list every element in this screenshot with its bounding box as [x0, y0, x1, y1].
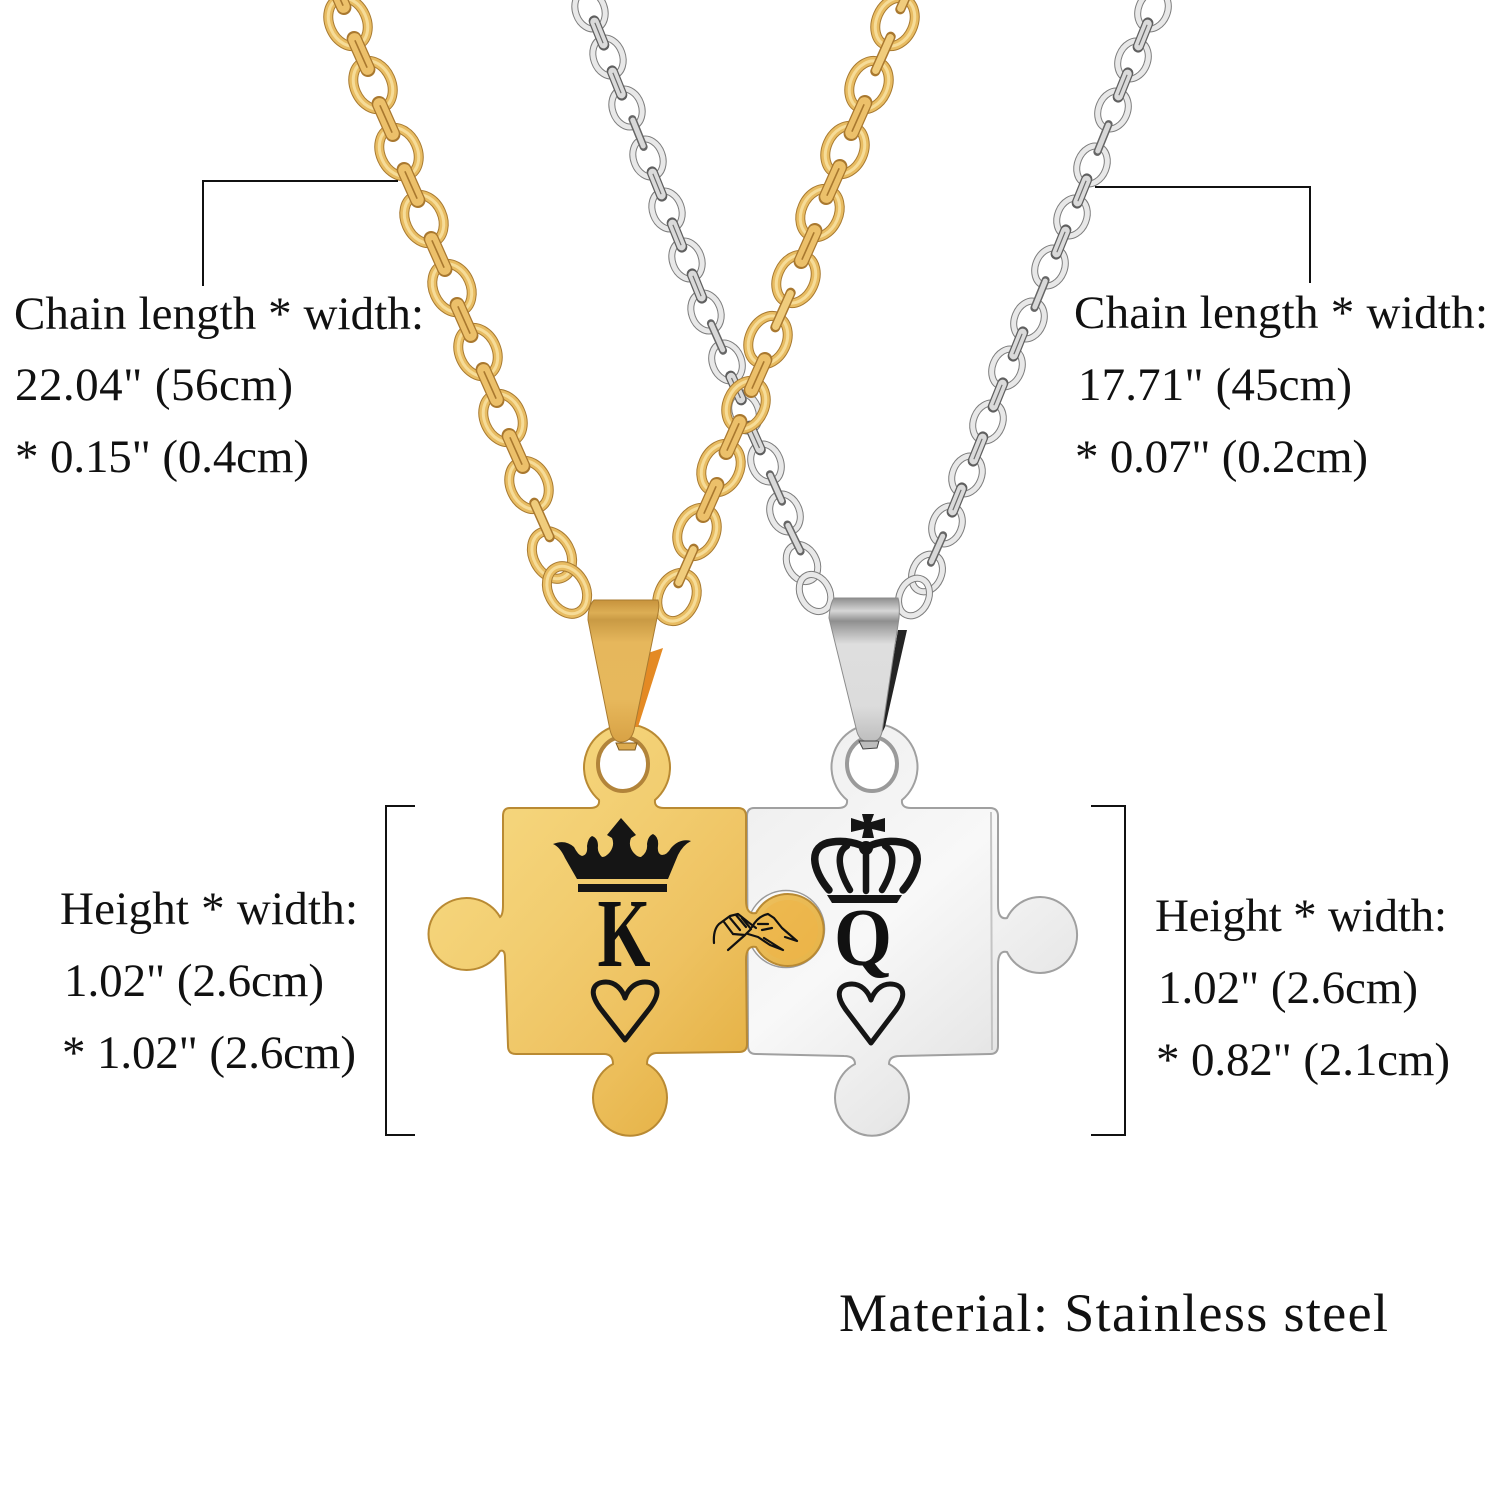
- bracket: left height: [386, 806, 415, 1135]
- pinky promise hands: [714, 914, 797, 950]
- label: material: Material: Stainless steel: [839, 1283, 1388, 1343]
- letter K: K: [598, 880, 650, 987]
- label: gold chain size: * 0.15" (0.4cm): [15, 431, 309, 483]
- silver loop hole: [847, 737, 897, 791]
- label: king pendant size: 1.02" (2.6cm): [64, 955, 324, 1007]
- silver bail: [829, 598, 899, 742]
- silver bail end: [859, 741, 879, 749]
- label: queen pendant size: 1.02" (2.6cm): [1158, 962, 1418, 1014]
- label: gold chain size: 22.04" (56cm): [15, 359, 293, 411]
- silver chain left strand: [570, 0, 837, 617]
- gold puzzle piece: [429, 724, 824, 1136]
- label: king pendant size: [60, 883, 358, 1079]
- letter Q: Q: [834, 892, 892, 983]
- label: queen pendant size: * 0.82" (2.1cm): [1156, 1034, 1450, 1086]
- silver queen pendant: [747, 598, 1077, 1136]
- gold king pendant: [429, 600, 824, 1136]
- silver bail side: [880, 630, 907, 737]
- queen crown: [815, 814, 917, 903]
- queen heart: [839, 984, 903, 1043]
- king crown: [553, 818, 691, 892]
- label: silver chain size: Chain length * width:: [1074, 287, 1488, 339]
- label: queen pendant size: [1155, 890, 1450, 1086]
- gold bail end: [616, 743, 637, 750]
- gold chain right strand: [650, 0, 922, 627]
- silver puzzle piece: [747, 724, 1077, 1136]
- gold chain left strand: [321, 0, 595, 621]
- silver chain right strand: [893, 0, 1174, 621]
- leader line: silver chain: [1095, 187, 1310, 283]
- gold knob shading: [758, 900, 818, 960]
- silver right edge shading: [991, 812, 992, 1050]
- label: queen pendant size: Height * width:: [1155, 890, 1447, 942]
- label: gold chain size: Chain length * width:: [14, 288, 424, 340]
- label: king pendant size: * 1.02" (2.6cm): [62, 1027, 356, 1079]
- label: silver chain size: [1074, 287, 1488, 483]
- label: king pendant size: Height * width:: [60, 883, 358, 935]
- label: gold chain size: [14, 288, 424, 483]
- label: silver chain size: 17.71" (45cm): [1078, 359, 1352, 411]
- label: silver chain size: * 0.07" (0.2cm): [1075, 431, 1368, 483]
- silver rim around gold knob: [748, 890, 824, 968]
- bracket: right height: [1091, 806, 1125, 1135]
- gold bail: [588, 600, 659, 742]
- leader line: gold chain: [203, 181, 398, 286]
- gold bail side: [633, 648, 663, 727]
- king heart: [593, 982, 657, 1040]
- gold loop hole: [598, 737, 648, 791]
